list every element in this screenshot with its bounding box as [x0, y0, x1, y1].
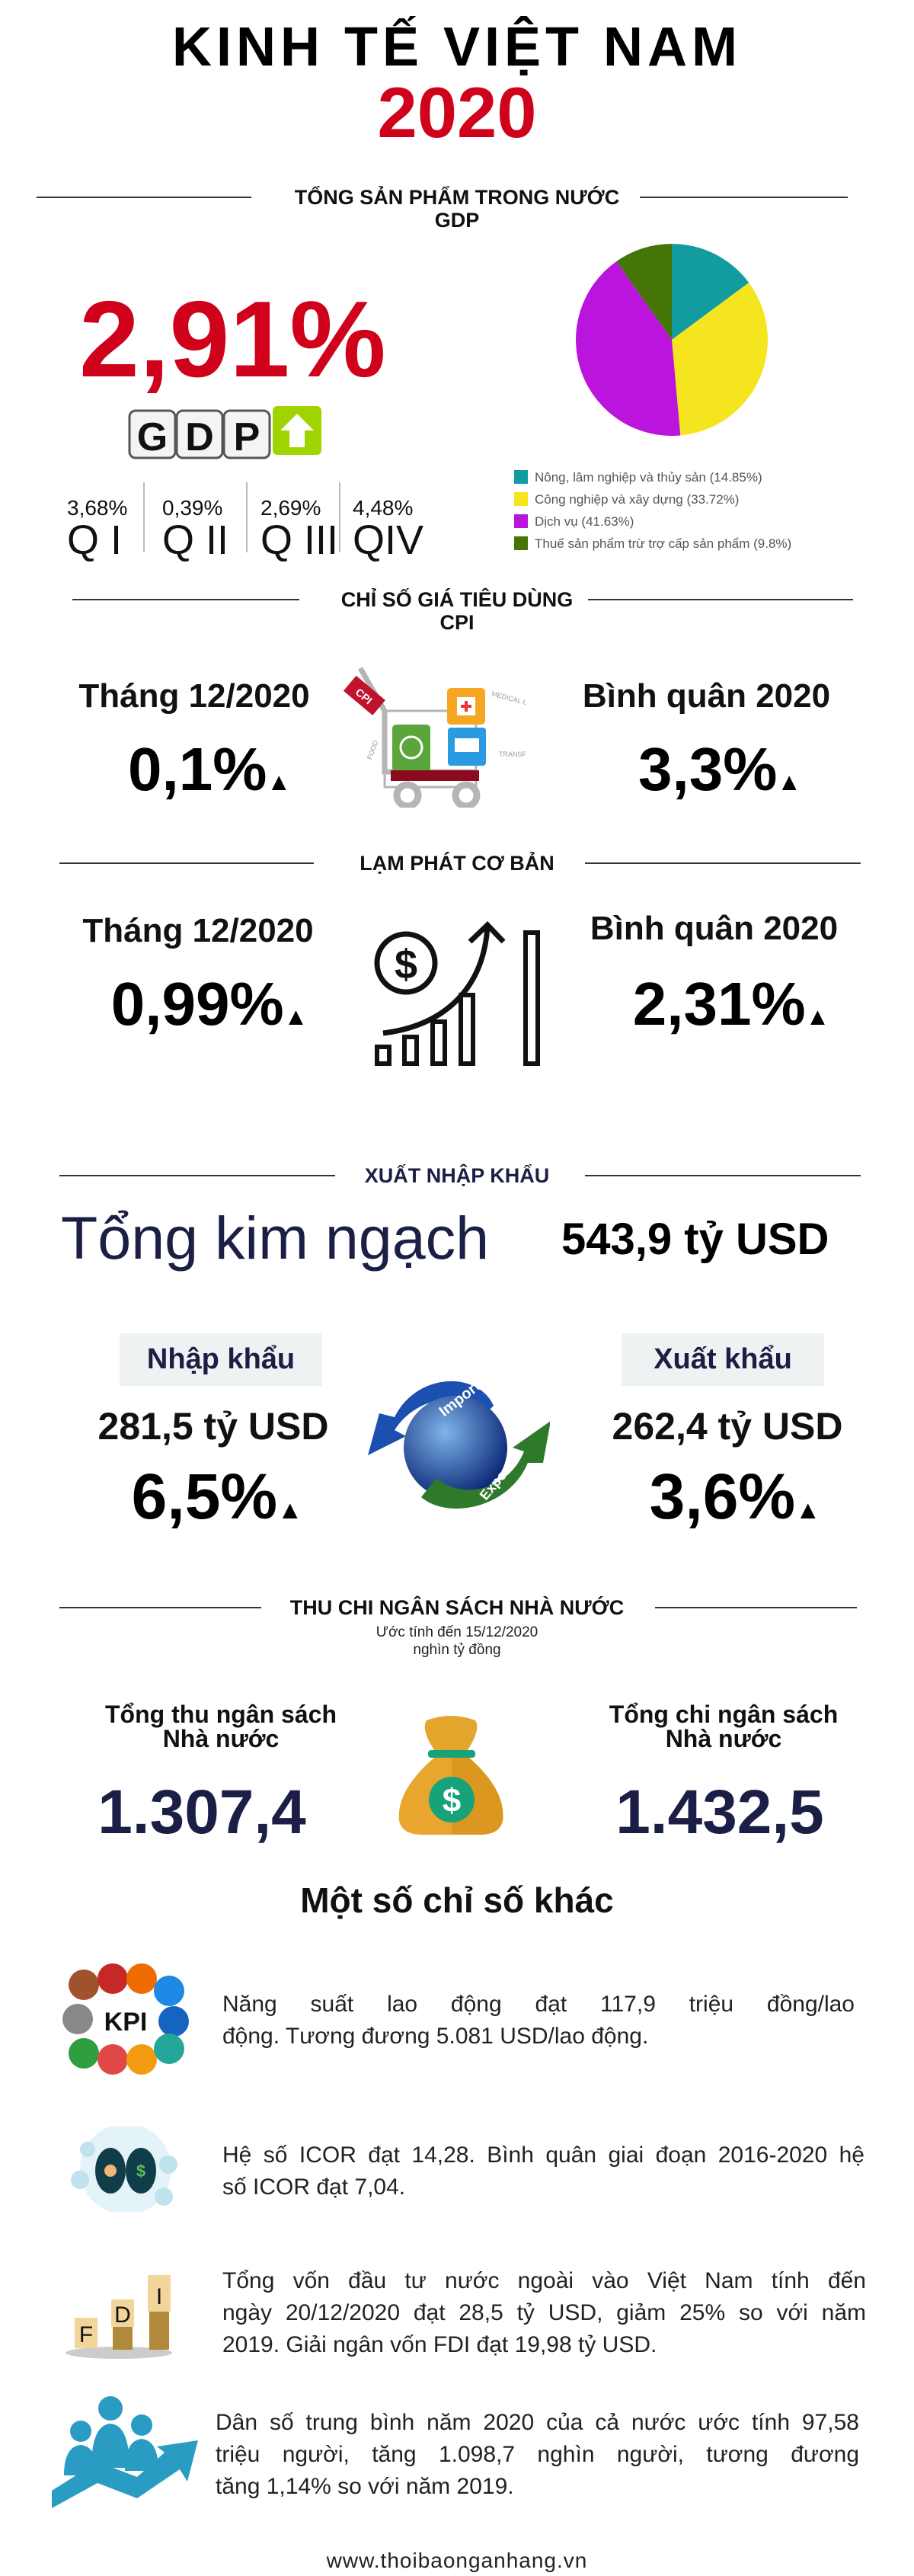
pie legend: Công nghiệp và xây dựng (33.72%) — [535, 492, 739, 507]
CPI average label: Bình quân 2020 — [583, 677, 830, 715]
total trade label: Tổng kim ngạch — [61, 1204, 489, 1272]
export label box: Xuất khẩu — [654, 1343, 792, 1375]
icon: FDI: D — [114, 2302, 131, 2328]
text: FDI: ngày 20/12/2020 đạt 28,5 tỷ USD, giảm 25% so với năm — [222, 2300, 866, 2325]
icon: globe import/export: Export — [477, 1460, 516, 1503]
total trade value: 543,9 tỷ USD — [561, 1214, 829, 1264]
budget spending label — [609, 1701, 838, 1752]
section heading: CPI: CHỈ SỐ GIÁ TIÊU DÙNG — [341, 588, 573, 611]
export growth: 3,6%▲ — [650, 1461, 820, 1532]
icon: ICOR: $ — [136, 2162, 145, 2181]
icon: GDP blocks: D — [185, 415, 214, 459]
core month label: Tháng 12/2020 — [82, 912, 314, 949]
pie legend: Nông, lâm nghiệp và thủy sản (14.85%) — [535, 470, 762, 485]
text: population: triệu người, tăng 1.098,7 nghìn người, tương đương — [216, 2442, 859, 2467]
export label box — [622, 1333, 824, 1386]
pie legend — [514, 470, 791, 551]
footer: www.thoibaonganhang.vn — [327, 2549, 587, 2572]
section heading: GDP: GDP — [435, 209, 479, 232]
icon: GDP blocks — [128, 406, 321, 459]
core average label: Bình quân 2020 — [590, 910, 838, 947]
icon: money bag: $ — [443, 1782, 461, 1819]
icon: KPI: KPI — [104, 2008, 147, 2037]
quarter I: 3,68% — [67, 496, 127, 520]
icon: globe import/export — [368, 1378, 550, 1509]
text: ICOR: Hệ số ICOR đạt 14,28. Bình quân giai đoạn 2016-2020 hệ — [222, 2142, 864, 2168]
quarter III: Q III — [260, 517, 338, 563]
icon: FDI — [66, 2275, 172, 2359]
icon: growth chart — [375, 921, 540, 1066]
GDP growth number: 2,91% — [79, 279, 386, 400]
icon: CPI cart: CPI — [353, 686, 375, 706]
section heading: budget: nghìn tỷ đồng — [413, 1642, 501, 1658]
import label box — [120, 1333, 322, 1386]
text: FDI — [222, 2268, 866, 2357]
text: population: tăng 1,14% so với năm 2019. — [216, 2474, 514, 2499]
icon: GDP blocks: P — [234, 415, 260, 459]
section heading: trade: XUẤT NHẬP KHẨU — [365, 1164, 549, 1187]
budget revenue label: Tổng thu ngân sách — [105, 1701, 337, 1728]
budget spending label: Tổng chi ngân sách — [609, 1701, 838, 1728]
section heading: GDP: TỔNG SẢN PHẨM TRONG NƯỚC — [295, 186, 619, 209]
quarter I — [67, 496, 127, 563]
icon: growth chart: $ — [395, 942, 417, 987]
quarter IV: 4,48% — [353, 496, 413, 520]
pie chart: GDP structure — [576, 244, 768, 436]
icon: GDP blocks: G — [137, 415, 168, 459]
icon: population — [52, 2396, 198, 2508]
quarter IV — [353, 496, 423, 563]
budget revenue label — [105, 1701, 337, 1752]
budget spending label: Nhà nước — [666, 1725, 781, 1752]
icon: globe import/export: Import — [436, 1378, 484, 1420]
CPI month label: Tháng 12/2020 — [78, 677, 310, 715]
CPI month value: 0,1%▲ — [128, 735, 291, 803]
icon: ICOR — [71, 2126, 177, 2212]
section heading: core inflation: LẠM PHÁT CƠ BẢN — [360, 852, 554, 875]
quarter II — [162, 496, 228, 563]
text: ICOR: số ICOR đạt 7,04. — [222, 2174, 405, 2200]
section heading: budget: THU CHI NGÂN SÁCH NHÀ NƯỚC — [290, 1596, 624, 1619]
title year: 2020 — [377, 72, 537, 152]
text: labour productivity: động. Tương đương 5.081 USD/lao động. — [222, 2024, 648, 2049]
icon: CPI cart: FOOD — [366, 739, 380, 760]
quarter III — [260, 496, 338, 563]
core average value: 2,31%▲ — [633, 970, 829, 1038]
quarter III: 2,69% — [260, 496, 321, 520]
icon: money bag — [399, 1716, 503, 1835]
icon: FDI: F — [79, 2322, 93, 2347]
quarterly GDP — [67, 482, 423, 563]
budget spending value: 1.432,5 — [615, 1778, 824, 1847]
text: labour productivity: Năng suất lao động đạt 117,9 triệu đồng/lao — [222, 1992, 855, 2017]
export value: 262,4 tỷ USD — [612, 1405, 842, 1448]
pie legend: Thuế sản phẩm trừ trợ cấp sản phẩm (9.8%) — [535, 536, 791, 551]
budget revenue value: 1.307,4 — [97, 1778, 306, 1847]
heading: other indicators: Một số chỉ số khác — [300, 1880, 614, 1920]
import label box: Nhập khẩu — [147, 1343, 295, 1375]
quarter II: Q II — [162, 517, 228, 563]
section heading: CPI — [72, 588, 853, 634]
section heading: GDP — [37, 186, 848, 232]
section heading: budget — [59, 1595, 857, 1658]
text: ICOR — [222, 2142, 864, 2200]
pie legend: Dịch vụ (41.63%) — [535, 514, 634, 529]
text: FDI: Tổng vốn đầu tư nước ngoài vào Việt Nam tính đến — [222, 2268, 866, 2293]
text: population — [216, 2410, 859, 2499]
icon: CPI cart — [344, 667, 526, 808]
section heading: budget: Ước tính đến 15/12/2020 — [376, 1624, 538, 1640]
quarter IV: QIV — [353, 517, 423, 563]
text: labour productivity — [222, 1992, 855, 2049]
CPI average value: 3,3%▲ — [638, 735, 801, 803]
import growth: 6,5%▲ — [132, 1461, 302, 1532]
import value: 281,5 tỷ USD — [98, 1405, 328, 1448]
text: population: Dân số trung bình năm 2020 của cả nước ước tính 97,58 — [216, 2410, 859, 2435]
text: FDI: 2019. Giải ngân vốn FDI đạt 19,98 tỷ USD. — [222, 2332, 657, 2357]
quarter II: 0,39% — [162, 496, 222, 520]
budget revenue label: Nhà nước — [163, 1725, 279, 1752]
icon: FDI: I — [156, 2284, 162, 2309]
icon: KPI — [62, 1963, 189, 2075]
section heading: CPI: CPI — [439, 611, 474, 634]
quarter I: Q I — [67, 517, 122, 563]
title: KINH TẾ VIỆT NAM — [172, 17, 742, 78]
core month value: 0,99%▲ — [111, 970, 308, 1038]
